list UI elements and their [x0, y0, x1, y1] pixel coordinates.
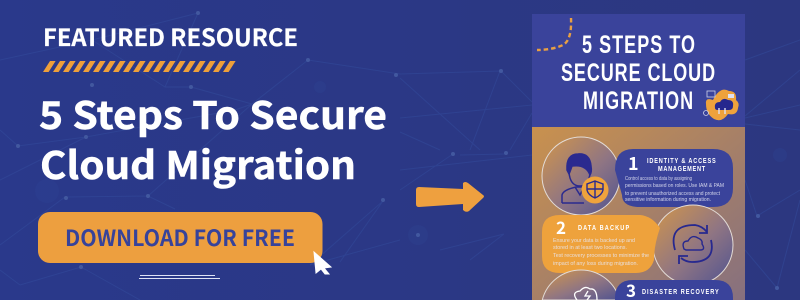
step 2: pill: impact of any loss during migration.: [553, 261, 638, 267]
step 1: pill: Control access to data by assigning: [625, 176, 692, 182]
step 2: pill: Test recovery processes to minimize the: [553, 253, 649, 259]
step 2: pill: DATA BACKUP: [578, 224, 629, 232]
main title: Cloud Migration: [40, 135, 356, 190]
step 3: icon: [575, 287, 597, 300]
infographic title: [562, 35, 714, 109]
icon: cloud network: [704, 90, 739, 120]
infographic title: MIGRATION: [583, 86, 693, 115]
step 1: person icon: [562, 154, 591, 203]
step 3: pill: DISASTER RECOVERY: [642, 288, 719, 296]
step 1: pill: sensitive information during migration.: [625, 197, 711, 203]
hazard stripe underline: [43, 61, 236, 72]
step 2: pill: Ensure your data is backed up and: [553, 238, 635, 244]
network blobs: [35, 81, 787, 245]
step 2: sync cloud icon: [674, 225, 712, 264]
decorative dashed footprints: [537, 18, 571, 50]
step 3: pill: [615, 280, 733, 300]
step 1: pill: permissions based on roles. Use IAM & PAM: [625, 183, 724, 189]
arrow: [416, 182, 484, 212]
panel: infographic preview: [532, 14, 745, 300]
heading: featured resource: FEATURED RESOURCE: [43, 19, 298, 53]
step 2: pill: 2: [556, 214, 566, 239]
step 2: pill: stored in at least two locations.: [553, 245, 627, 251]
main title: [39, 85, 387, 190]
panel header: [532, 14, 745, 127]
step 1: shield badge: [582, 176, 608, 204]
step 2: circle: [653, 205, 733, 285]
step 1: pill: MANAGEMENT: [658, 165, 705, 173]
step 2: pill: [542, 214, 660, 273]
step 1: pill: 1: [628, 150, 639, 176]
step 3: circle: [542, 270, 620, 300]
download button: DOWNLOAD FOR FREE: [65, 221, 295, 253]
step 1: pill: IDENTITY & ACCESS: [647, 157, 716, 165]
step 1: circle: [542, 137, 620, 215]
step 1: pill: to prevent unauthorized access and protect: [625, 191, 720, 197]
main title: 5 Steps To Secure: [39, 85, 387, 140]
infographic title: 5 STEPS TO: [582, 30, 695, 59]
infographic title: SECURE CLOUD: [561, 58, 715, 87]
button underline strokes: [139, 276, 220, 278]
step 1: pill: [615, 149, 733, 207]
icon: cursor: [314, 252, 331, 274]
panel body: [532, 127, 745, 300]
download button: [38, 212, 322, 263]
